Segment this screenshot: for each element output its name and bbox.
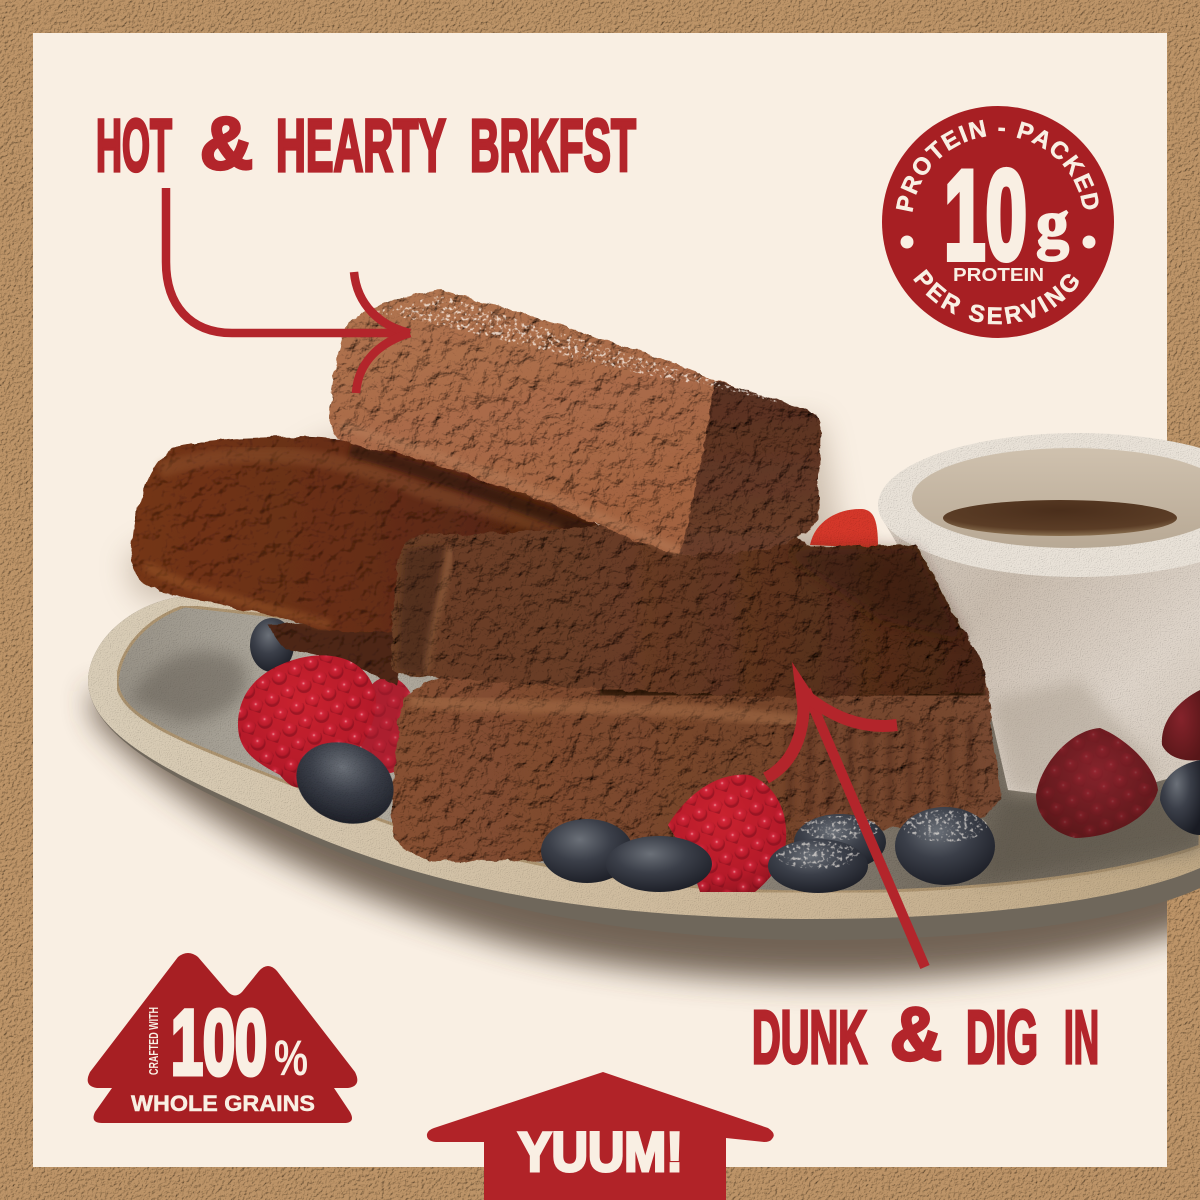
raspberry behind bbox=[358, 677, 418, 773]
badge label: PROTEIN bbox=[953, 265, 1044, 285]
blueberries: front row bbox=[541, 807, 995, 893]
heading: hot and hearty brkfst: BRKFST bbox=[470, 104, 636, 187]
raspberry: far right edge bbox=[1162, 690, 1200, 760]
bar ridges bbox=[790, 720, 970, 818]
heading: hot and hearty brkfst bbox=[96, 102, 636, 187]
bar: lower bbox=[392, 676, 1001, 861]
arrow tab: yuum: YUUM! bbox=[518, 1120, 683, 1183]
bar end face bbox=[680, 380, 820, 556]
blueberry: left bbox=[284, 728, 406, 838]
caption: dunk and dig in: DUNK bbox=[752, 995, 867, 1079]
heading: hot and hearty brkfst: & bbox=[200, 102, 253, 185]
100 percent: 100 bbox=[171, 992, 267, 1094]
syrup bbox=[943, 500, 1177, 536]
blueberry behind stack bbox=[250, 618, 294, 672]
arrow: from heading to top bar bbox=[166, 188, 410, 393]
photo: plate shadow on panel bbox=[90, 420, 1200, 981]
caption: dunk and dig in bbox=[752, 992, 1099, 1079]
blueberry: far right edge bbox=[1160, 760, 1200, 835]
whole grains: WHOLE GRAINS bbox=[131, 1091, 315, 1116]
cup rim bbox=[878, 433, 1200, 577]
bar: rear left bbox=[131, 437, 620, 685]
badge: 100% whole grains bbox=[88, 953, 357, 1123]
arrow tab: yuum bbox=[427, 1072, 774, 1200]
badge dots bbox=[900, 236, 1096, 248]
badge: 10g protein bbox=[882, 106, 1114, 338]
raspberry behind stack bbox=[810, 509, 878, 548]
cup body bbox=[880, 490, 1200, 800]
bar: top bbox=[330, 291, 820, 556]
badge arc text top: PROTEIN - PACKED bbox=[896, 120, 1098, 212]
badge unit: g bbox=[1036, 185, 1069, 261]
arrow: from dunk caption up to bar bbox=[766, 662, 925, 967]
photo: food composition bbox=[88, 291, 1200, 940]
caption: dunk and dig in: & bbox=[890, 992, 942, 1076]
caption: dunk and dig in: DIG bbox=[966, 995, 1038, 1079]
percent sign: % bbox=[274, 1030, 308, 1086]
heading: hot and hearty brkfst: HEARTY bbox=[276, 104, 446, 187]
crafted with: CRAFTED WITH bbox=[147, 1007, 161, 1075]
badge number: 10 bbox=[944, 144, 1027, 286]
cup inner wall bbox=[912, 448, 1200, 548]
plate bbox=[88, 597, 1200, 940]
bar: middle bbox=[392, 526, 986, 698]
badge arc text bottom: PER SERVING bbox=[913, 269, 1079, 324]
raspberry: right dark bbox=[1036, 728, 1158, 838]
heading: hot and hearty brkfst: HOT bbox=[96, 104, 172, 187]
text: IN bbox=[1064, 995, 1099, 1079]
raspberry: front centre bbox=[668, 775, 786, 892]
syrup cup bbox=[878, 433, 1200, 800]
raspberry: left large bbox=[238, 655, 376, 787]
